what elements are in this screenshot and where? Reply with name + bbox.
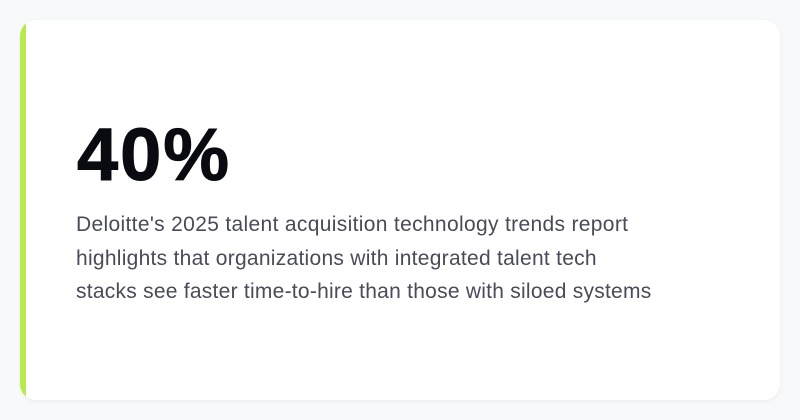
description text: highlights that organizations with integrated talent tech [76, 247, 597, 270]
accent bar [20, 24, 26, 396]
description text: stacks see faster time-to-hire than those with siloed systems [76, 280, 651, 303]
headline statistic: 40% [77, 113, 231, 196]
description text [76, 213, 651, 303]
description text: Deloitte's 2025 talent acquisition technology trends report [76, 213, 628, 236]
